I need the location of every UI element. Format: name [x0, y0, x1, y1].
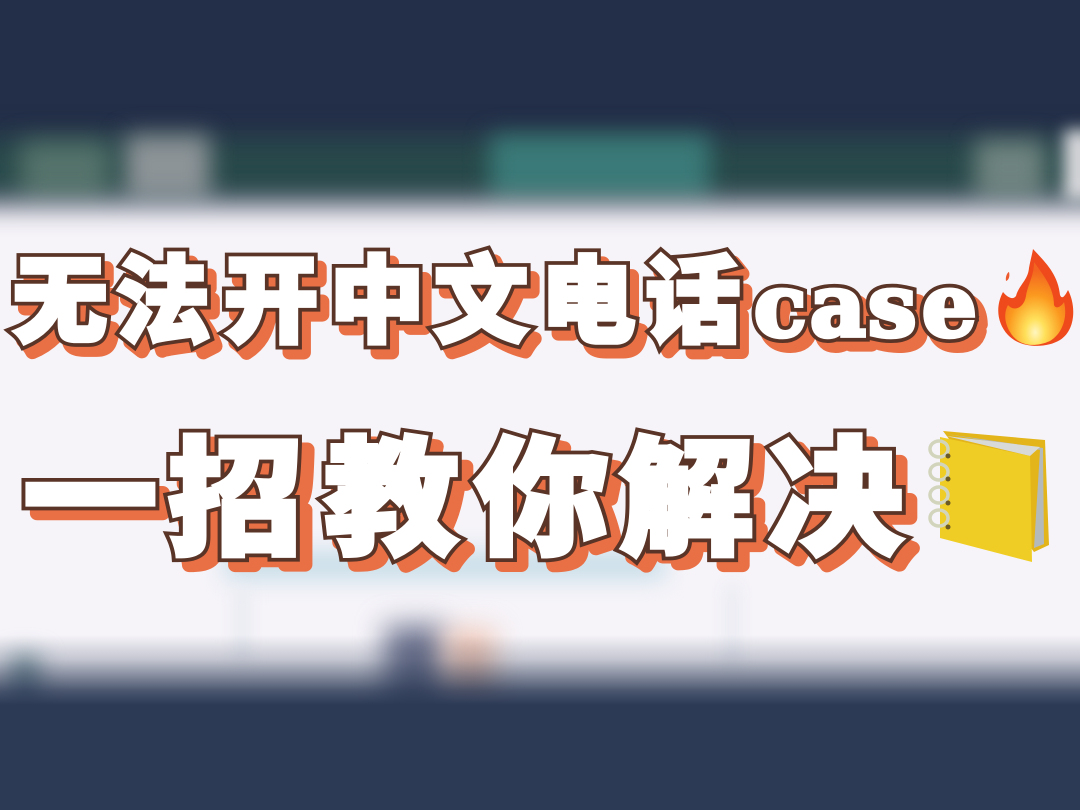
title line 1: 无法开中文电话 — [13, 249, 740, 354]
title line 2: 一招教你解决 — [23, 428, 903, 571]
icon: fire — [998, 249, 1073, 346]
title line 1: case — [754, 256, 977, 357]
title line 1 — [13, 249, 985, 366]
title line 1: 无法开中文电话 — [13, 249, 740, 354]
title line 1: case — [754, 256, 977, 357]
title line 2: 一招教你解决 — [23, 428, 903, 571]
title line 1: 无法开中文电话 — [21, 258, 748, 363]
title line 1: case — [762, 265, 985, 366]
title line 2: 一招教你解决 — [33, 437, 913, 580]
icon: yellow spiral notebook — [930, 431, 1049, 562]
